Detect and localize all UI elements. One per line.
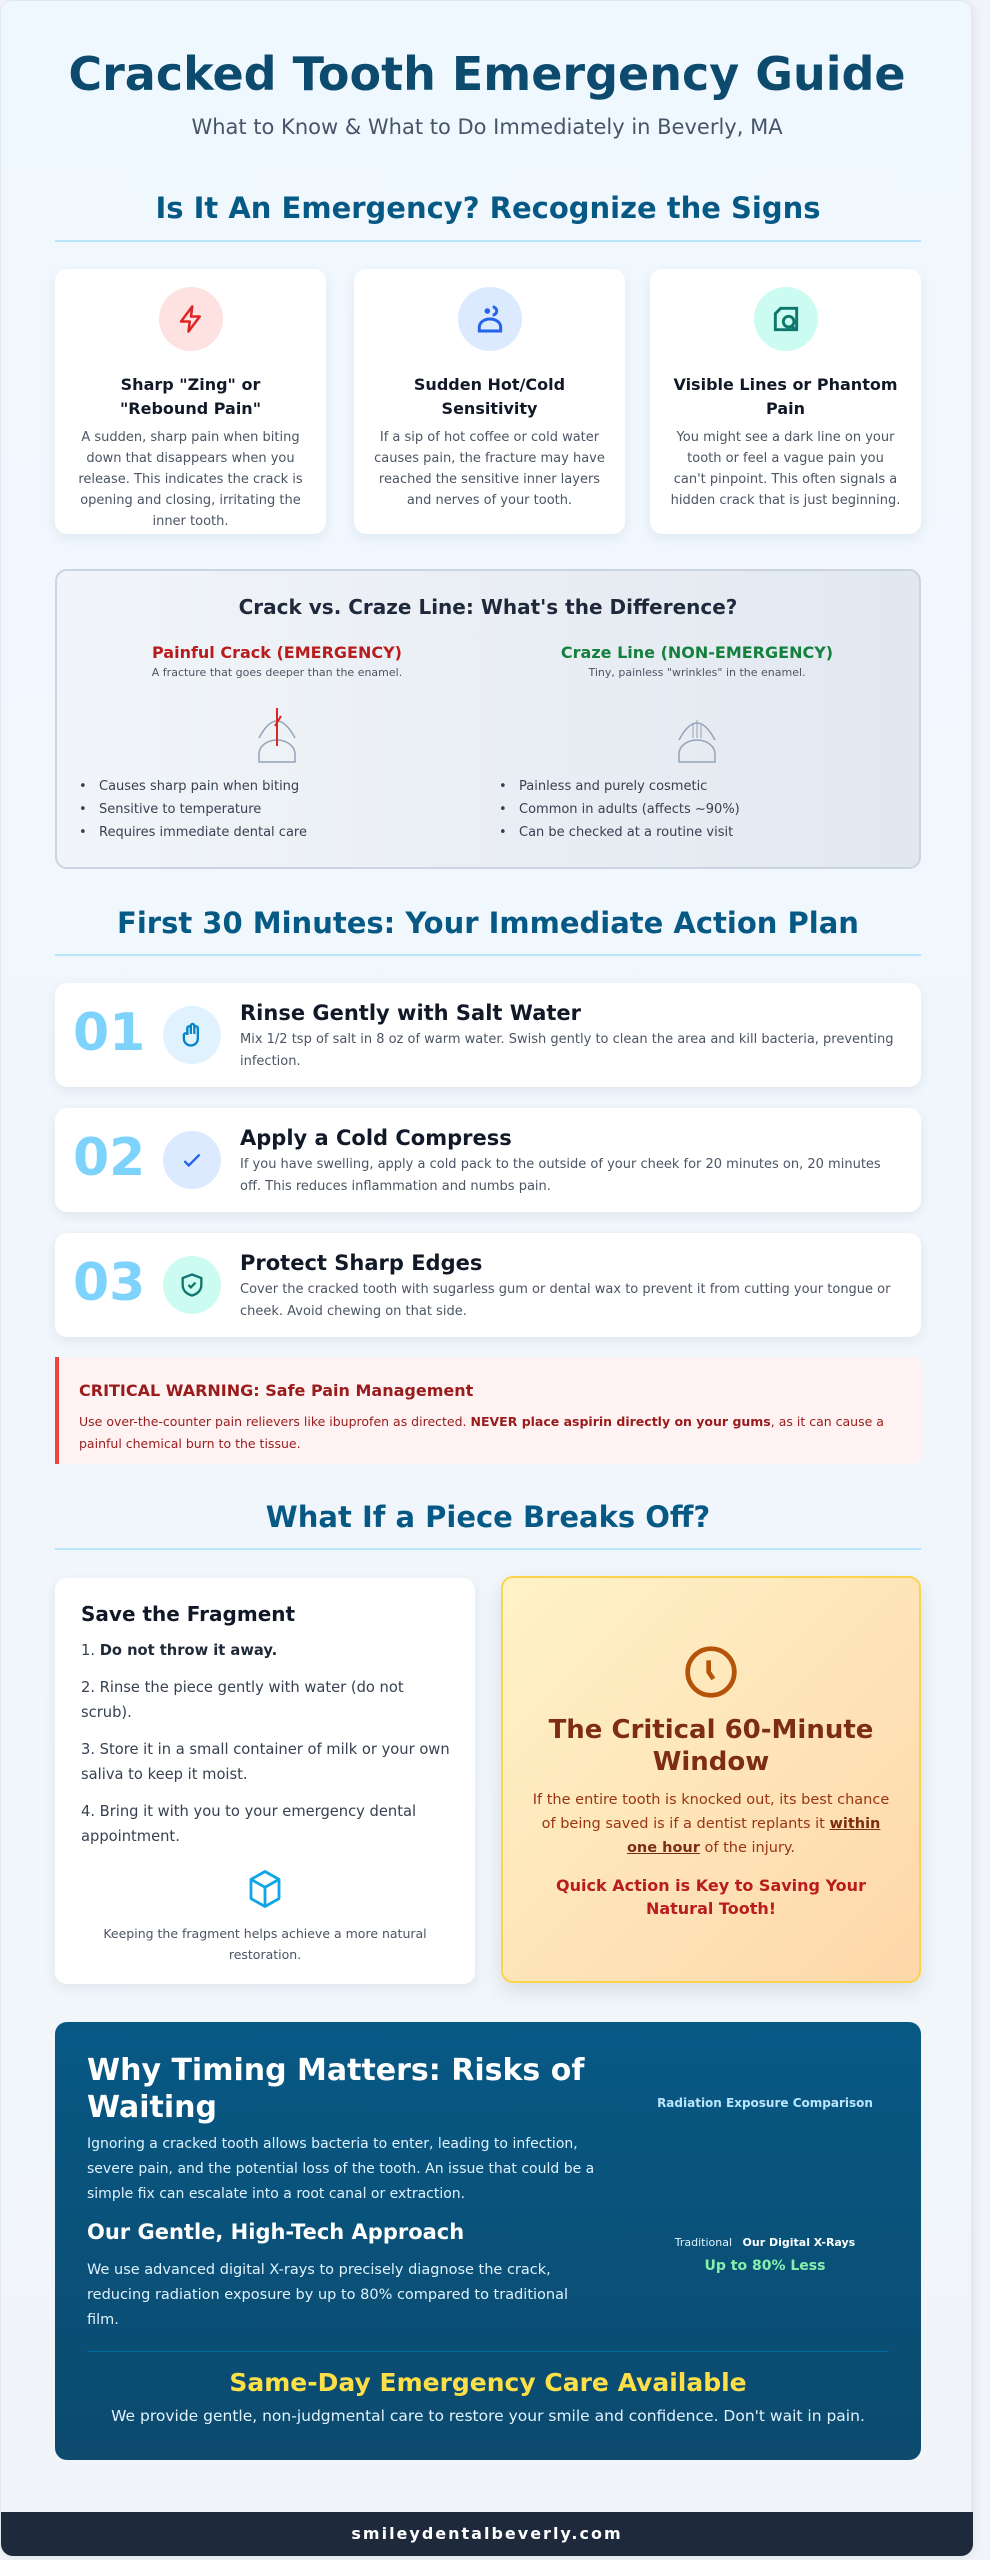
callout: critical warning	[55, 1357, 921, 1464]
step 3: Protect Sharp Edges	[240, 1251, 482, 1275]
list: crack: Sensitive to temperature	[99, 802, 261, 817]
icon: hand	[163, 1006, 221, 1064]
heading: recognize signs: Is It An Emergency? Recognize the Signs	[155, 191, 821, 225]
card: 60-minute window: If the entire tooth is knocked out, its best chance of being saved is if a dentist replants it within one hour of the injury.	[533, 1792, 889, 1856]
step 2	[55, 1108, 921, 1212]
chart: radiation comparison: Up to 80% Less	[705, 2258, 825, 2274]
card: 60-minute window: The Critical 60-Minute Window	[549, 1715, 873, 1777]
chart: radiation comparison	[657, 2096, 873, 2274]
card: save the fragment: 4. Bring it with you to your emergency dental appointment.	[81, 1803, 416, 1845]
panel: why timing matters	[55, 2022, 921, 2460]
panel heading: Crack vs. Craze Line: What's the Difference?	[239, 595, 737, 619]
footer: smileydentalbeverly.com	[351, 2524, 623, 2543]
icon: box	[250, 1870, 280, 1908]
card: visible lines	[650, 269, 921, 534]
column: craze	[561, 643, 833, 679]
step 1: Mix 1/2 tsp of salt in 8 oz of warm water. Swish gently to clean the area and kill bacteria, preventing infection.	[240, 1032, 894, 1069]
text: risks: Ignoring a cracked tooth allows bacteria to enter, leading to infection, severe pain, and the potential loss of the tooth. An issue that could be a simple fix can escalate into a root canal or extraction.	[87, 2136, 594, 2202]
chart: radiation comparison: Radiation Exposure Comparison	[657, 2096, 873, 2110]
banner: same-day care	[111, 2368, 865, 2425]
column: craze: Tiny, painless "wrinkles" in the enamel.	[588, 666, 806, 679]
card: save the fragment: Save the Fragment	[81, 1602, 295, 1626]
list: crack: Requires immediate dental care	[99, 825, 307, 840]
card: 60-minute window	[501, 1576, 921, 1983]
card: sharp zing: Sharp "Zing" or	[121, 375, 260, 394]
card: sharp zing: A sudden, sharp pain when biting down that disappears when you release. This indicates the crack is opening and closing, irritating the inner tooth.	[78, 430, 303, 529]
card: save the fragment	[55, 1578, 475, 1984]
card: save the fragment: 2. Rinse the piece gently with water (do not scrub).	[81, 1679, 404, 1721]
card: hot/cold: If a sip of hot coffee or cold water causes pain, the fracture may have reached the sensitive inner layers and nerves of your tooth.	[374, 430, 605, 508]
card: hot/cold	[354, 269, 625, 534]
heading: piece breaks off: What If a Piece Breaks Off?	[266, 1500, 710, 1534]
subtitle: What to Know & What to Do Immediately in Beverly, MA	[191, 115, 783, 139]
card: save the fragment: 1. Do not throw it away.	[81, 1642, 277, 1659]
card: visible lines: Pain	[766, 399, 805, 418]
list: craze: Common in adults (affects ~90%)	[519, 802, 740, 817]
icon: clock	[685, 1646, 737, 1698]
panel: crack vs craze	[55, 569, 921, 869]
step 2: Apply a Cold Compress	[240, 1126, 512, 1150]
list: craze	[501, 779, 740, 840]
list: crack: Causes sharp pain when biting	[99, 779, 299, 794]
title: Cracked Tooth Emergency Guide	[68, 47, 906, 101]
icon: craze tooth	[678, 720, 716, 763]
card: 60-minute window: Quick Action is Key to Saving Your Natural Tooth!	[556, 1876, 866, 1918]
step 3: 03	[73, 1253, 145, 1313]
column: craze: Craze Line (NON-EMERGENCY)	[561, 643, 833, 662]
card: visible lines: You might see a dark line on your tooth or feel a vague pain you can't pinpoint. This often signals a hidden crack that is just beginning.	[671, 430, 900, 508]
icon: check	[163, 1131, 221, 1189]
banner: same-day care: We provide gentle, non-judgmental care to restore your smile and confidence. Don't wait in pain.	[111, 2407, 865, 2425]
banner: same-day care: Same-Day Emergency Care Available	[229, 2368, 747, 2397]
list: crack	[81, 779, 307, 840]
icon: temperature	[458, 287, 522, 351]
callout: critical warning: Use over-the-counter pain relievers like ibuprofen as directed. NEVER place aspirin directly on your gums, as it can cause a painful chemical burn to the tissue.	[79, 1414, 884, 1451]
heading: action plan: First 30 Minutes: Your Immediate Action Plan	[117, 906, 859, 940]
icon: magnifier	[754, 287, 818, 351]
card: hot/cold: Sudden Hot/Cold	[414, 375, 565, 394]
icon: cracked tooth	[258, 708, 296, 763]
card: hot/cold: Sensitivity	[442, 399, 537, 418]
step 1	[55, 983, 921, 1087]
list: craze: Painless and purely cosmetic	[519, 779, 707, 794]
column: crack: Painful Crack (EMERGENCY)	[152, 643, 402, 662]
subheading: Our Gentle, High-Tech Approach	[87, 2220, 464, 2244]
column: crack: A fracture that goes deeper than the enamel.	[152, 666, 402, 679]
text: approach: We use advanced digital X-rays to precisely diagnose the crack, reducing radiation exposure by up to 80% compared to traditional film.	[87, 2262, 568, 2328]
step 3: Cover the cracked tooth with sugarless gum or dental wax to prevent it from cutting your tongue or cheek. Avoid chewing on that side.	[240, 1282, 890, 1319]
column: crack	[152, 643, 402, 679]
step 2: 02	[73, 1128, 145, 1188]
step 1: 01	[73, 1003, 145, 1063]
chart: radiation comparison: Traditional Our Digital X-Rays	[675, 2236, 855, 2249]
card: visible lines: Visible Lines or Phantom	[673, 375, 898, 394]
icon: shield	[163, 1256, 221, 1314]
step 3	[55, 1233, 921, 1337]
card: save the fragment: 3. Store it in a small container of milk or your own saliva to keep it moist.	[81, 1741, 450, 1783]
card: sharp zing: "Rebound Pain"	[120, 399, 261, 418]
card: sharp zing	[55, 269, 326, 534]
step 1: Rinse Gently with Salt Water	[240, 1001, 581, 1025]
footer	[1, 2512, 973, 2556]
card: save the fragment: Keeping the fragment helps achieve a more natural restoration.	[103, 1926, 427, 1962]
callout: critical warning: CRITICAL WARNING: Safe Pain Management	[79, 1381, 473, 1400]
heading: Why Timing Matters: Risks of Waiting	[87, 2053, 584, 2125]
icon: lightning	[158, 287, 222, 351]
step 2: If you have swelling, apply a cold pack to the outside of your cheek for 20 minutes on, 20 minutes off. This reduces inflammation and numbs pain.	[240, 1157, 881, 1194]
list: craze: Can be checked at a routine visit	[519, 825, 733, 840]
